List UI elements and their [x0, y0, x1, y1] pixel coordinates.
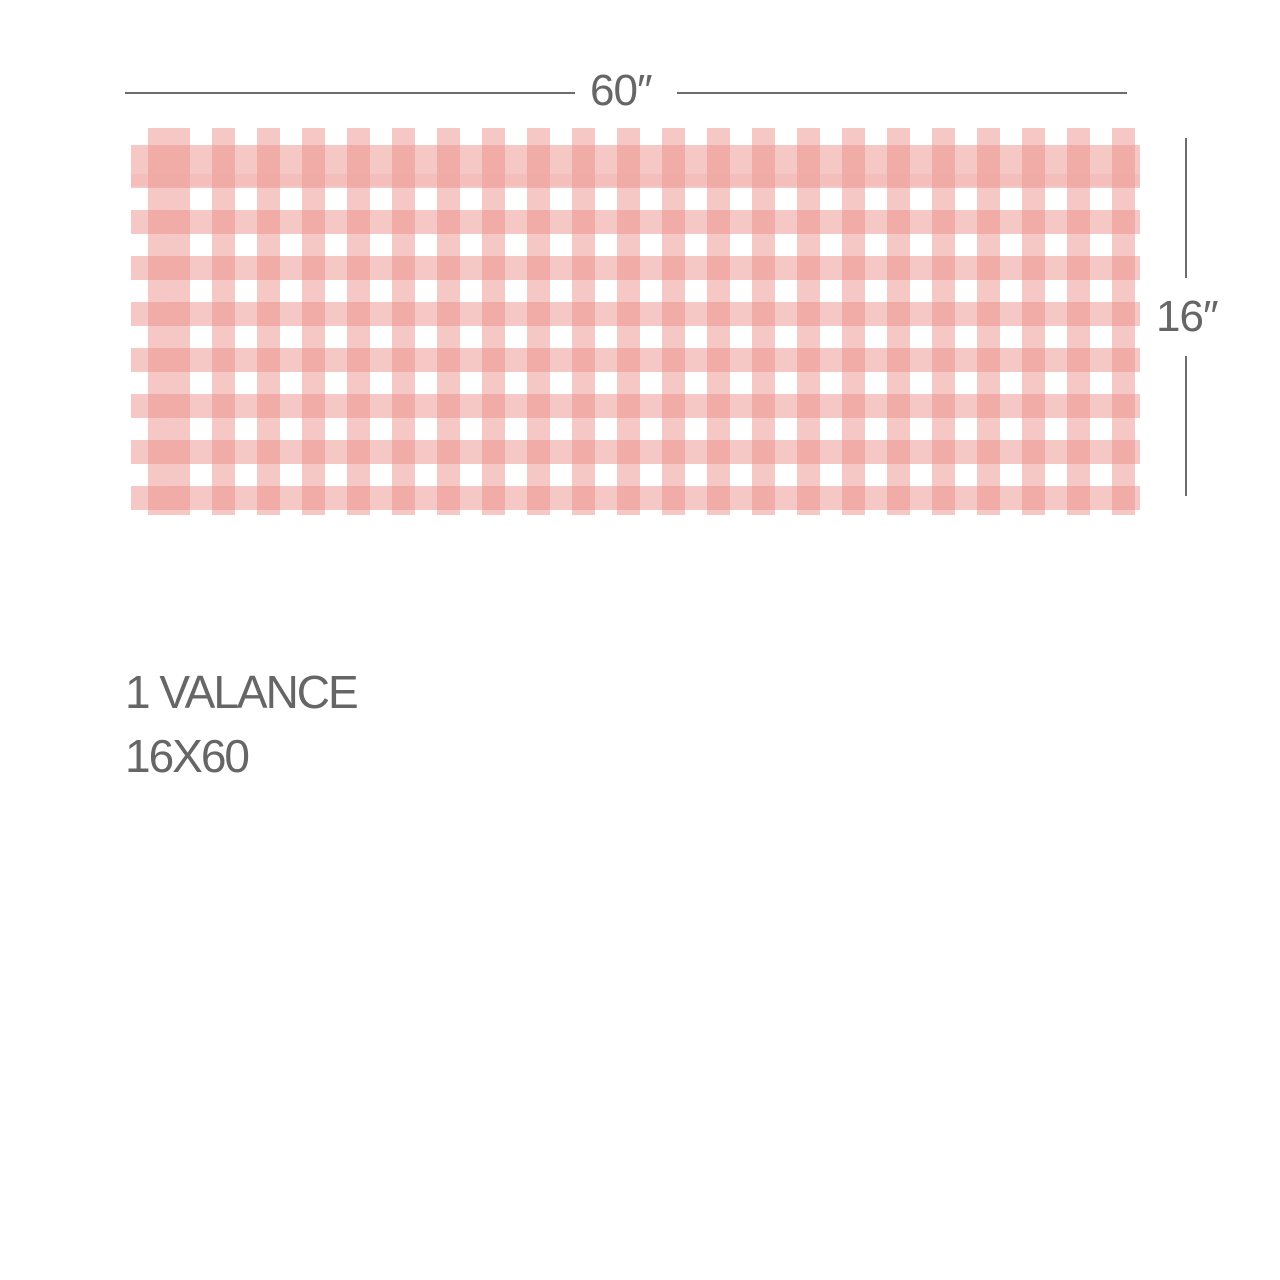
- product description text: 16X60: [125, 730, 248, 782]
- dimension: height 16 inches: 16″: [1156, 292, 1218, 341]
- valance curtain image: [131, 128, 1140, 515]
- dimension: width 60 inches: 60″: [590, 66, 652, 115]
- product description text: 1 VALANCE: [125, 666, 357, 718]
- rod pocket gather line: [131, 174, 1140, 186]
- product description text: [125, 666, 357, 782]
